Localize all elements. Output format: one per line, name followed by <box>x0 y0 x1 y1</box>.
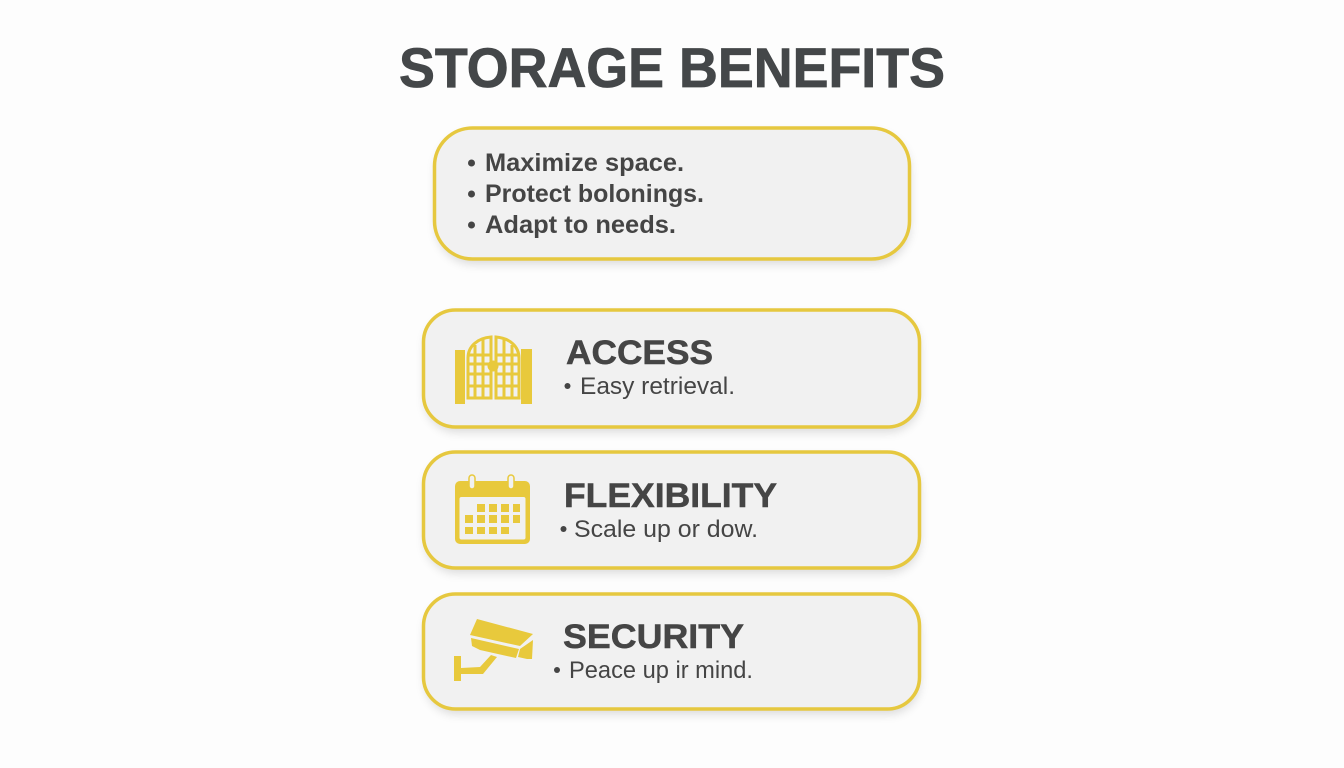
heading: flexibility: FLEXIBILITY <box>564 477 777 515</box>
access bullet: Easy retrieval. <box>580 373 735 400</box>
heading: security: SECURITY <box>563 618 744 656</box>
icon: gate <box>455 337 532 404</box>
security bullet: Peace up ir mind. <box>569 657 753 684</box>
panel: security <box>424 594 920 714</box>
panel: summary <box>434 128 910 264</box>
summary bullet list: Maximize space. <box>485 149 684 177</box>
summary bullet list <box>468 149 704 239</box>
flexibility bullet: Scale up or dow. <box>574 516 758 543</box>
panel: access <box>424 310 920 432</box>
summary bullet list: Protect bolonings. <box>485 180 704 208</box>
panel: flexibility <box>424 452 920 573</box>
summary bullet list: Adapt to needs. <box>485 211 676 239</box>
icon: calendar <box>455 475 530 544</box>
title: STORAGE BENEFITS <box>399 36 945 99</box>
heading: access: ACCESS <box>566 334 713 372</box>
icon: security camera <box>454 619 533 681</box>
